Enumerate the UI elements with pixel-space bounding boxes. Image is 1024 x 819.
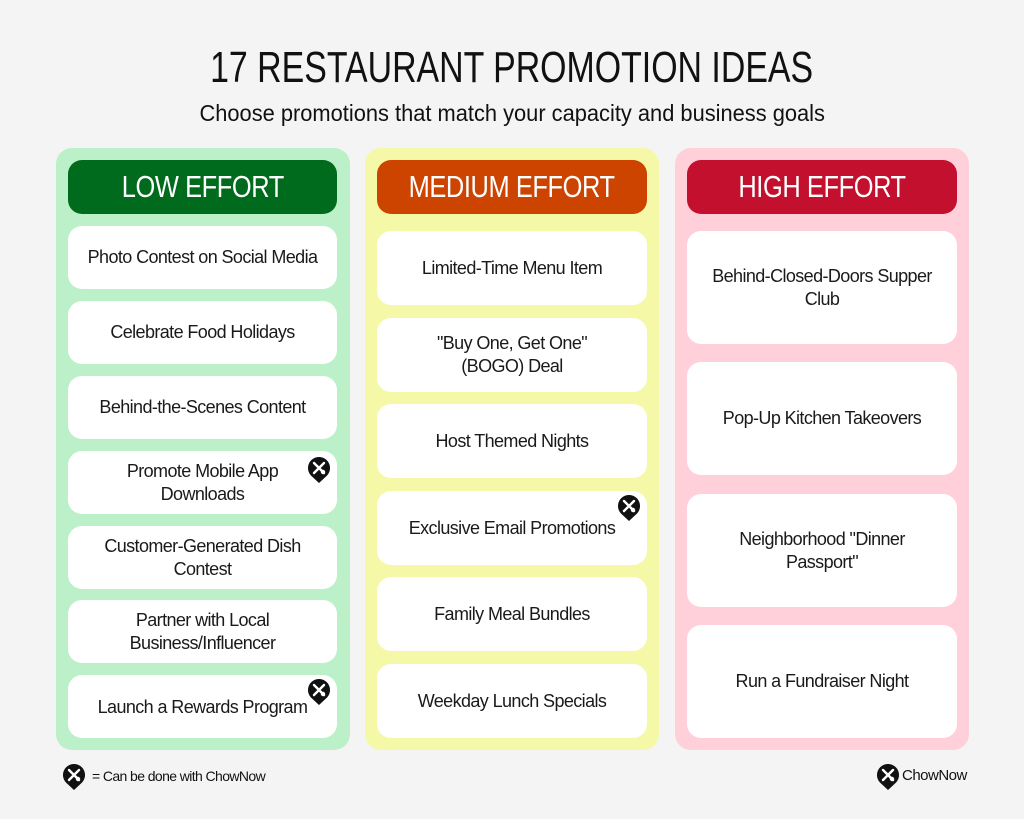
heading: high effort — [687, 160, 957, 214]
legend: = Can be done with ChowNow — [92, 768, 265, 784]
heading: low effort: LOW EFFORT — [121, 169, 284, 204]
logo: chownow — [877, 764, 968, 790]
card — [687, 494, 957, 607]
card: Promote Mobile App — [127, 460, 278, 480]
panel: medium effort — [365, 148, 659, 750]
card: Launch a Rewards Program — [98, 697, 307, 717]
heading: low effort — [68, 160, 337, 214]
card — [377, 404, 647, 478]
card — [377, 491, 647, 565]
card: Passport" — [786, 552, 858, 572]
card: Weekday Lunch Specials — [418, 690, 606, 710]
icon: chownow rewards — [308, 679, 330, 705]
heading: medium effort — [377, 160, 647, 214]
card: Behind-the-Scenes Content — [99, 397, 306, 417]
card: Business/Influencer — [130, 632, 275, 652]
card — [377, 577, 647, 651]
card: "Buy One, Get One" — [437, 333, 587, 353]
card — [377, 318, 647, 392]
card: Partner with Local — [136, 610, 269, 630]
high cards: Behind-Closed-Doors Supper — [712, 266, 932, 286]
panel: low effort — [56, 148, 350, 750]
panel: high effort — [675, 148, 969, 750]
icon: chownow email — [618, 495, 640, 521]
icon: chownow mobile app — [308, 457, 330, 483]
card — [68, 451, 337, 514]
title: 17 RESTAURANT PROMOTION IDEAS — [210, 43, 814, 92]
legend — [63, 764, 266, 790]
heading: high effort: HIGH EFFORT — [738, 169, 906, 204]
card: (BOGO) Deal — [461, 356, 563, 376]
heading: medium effort: MEDIUM EFFORT — [409, 169, 615, 204]
low cards — [68, 226, 337, 289]
high cards: Club — [805, 288, 839, 308]
logo: chownow: ChowNow — [902, 767, 967, 784]
card — [377, 664, 647, 738]
medium cards — [377, 231, 647, 305]
card — [68, 301, 337, 364]
card: Pop-Up Kitchen Takeovers — [723, 408, 921, 428]
card: Downloads — [161, 484, 244, 504]
card: Customer-Generated Dish — [104, 536, 301, 556]
card: Neighborhood "Dinner — [739, 528, 905, 548]
low cards: Photo Contest on Social Media — [88, 247, 317, 267]
card — [68, 526, 337, 589]
card: Contest — [174, 558, 231, 578]
card — [687, 362, 957, 475]
card — [687, 625, 957, 738]
card — [68, 376, 337, 439]
high cards — [687, 231, 957, 344]
card: Celebrate Food Holidays — [110, 322, 295, 342]
card — [68, 600, 337, 663]
card: Exclusive Email Promotions — [409, 518, 615, 538]
card — [68, 675, 337, 738]
medium cards: Limited-Time Menu Item — [422, 258, 602, 278]
card: Host Themed Nights — [436, 430, 588, 450]
subtitle: Choose promotions that match your capacity and business goals — [199, 100, 825, 126]
card: Family Meal Bundles — [434, 604, 590, 624]
card: Run a Fundraiser Night — [736, 671, 908, 691]
